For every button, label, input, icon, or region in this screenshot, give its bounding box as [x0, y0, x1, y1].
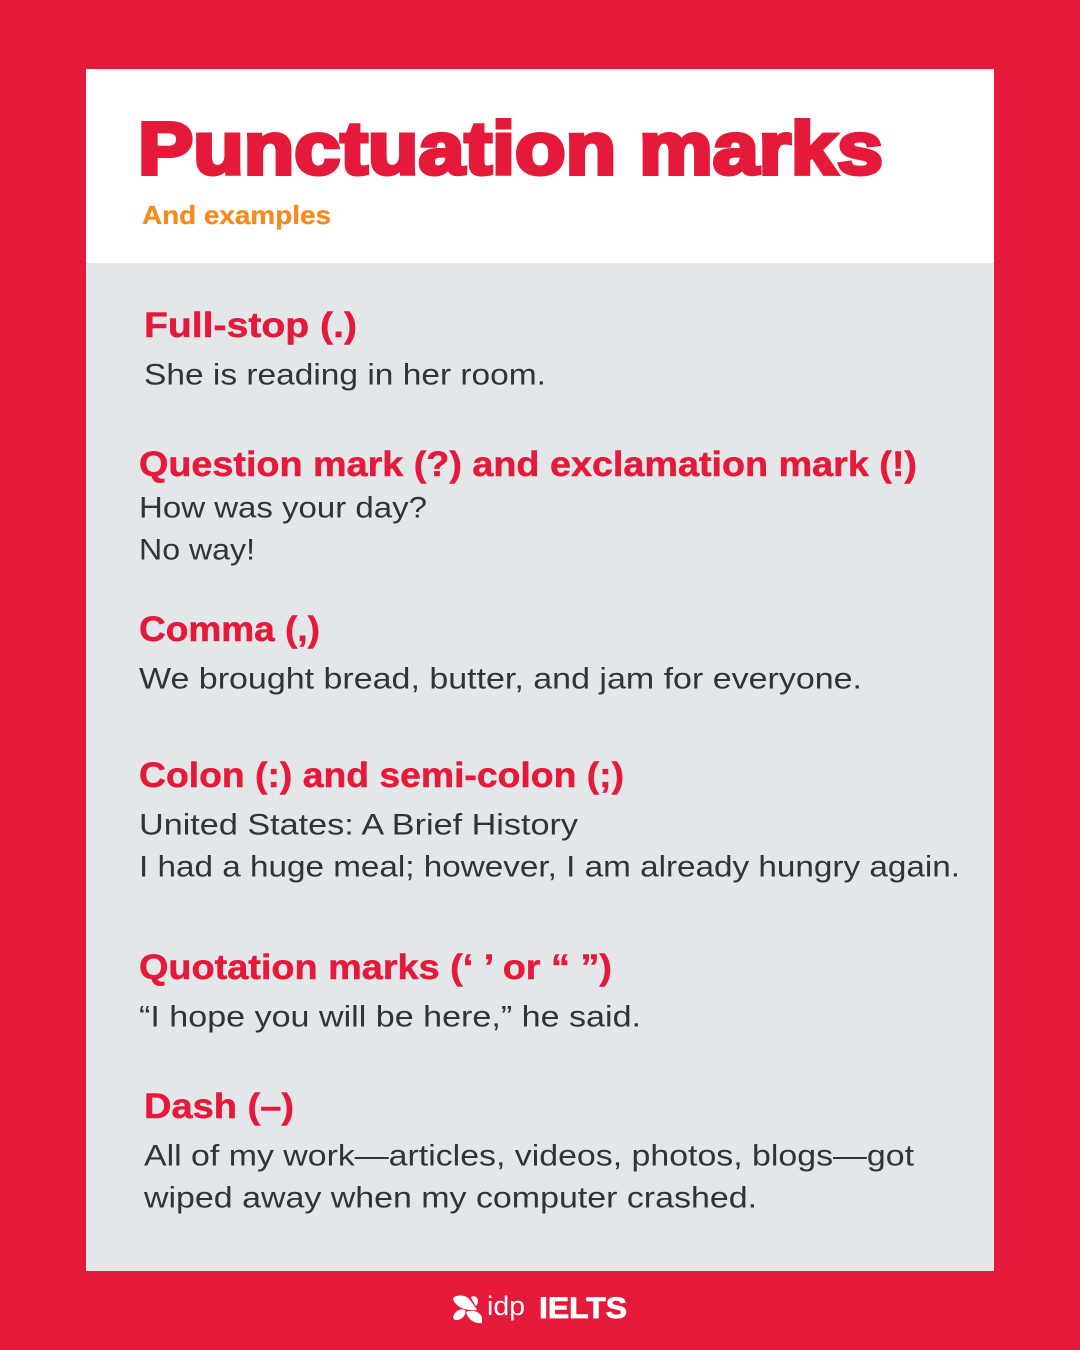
section: question and exclamation marks: How was your day?	[139, 492, 427, 524]
section: quotation marks	[139, 948, 641, 1034]
section: question and exclamation marks: Question mark (?) and exclamation mark (!)	[139, 445, 917, 484]
content panel	[86, 263, 994, 1271]
section: full-stop	[144, 306, 546, 392]
section: dash: Dash (–)	[144, 1087, 294, 1126]
section: dash: All of my work—articles, videos, photos, blogs—got	[144, 1140, 915, 1172]
section: quotation marks: “I hope you will be here,” he said.	[139, 1000, 641, 1034]
logo: idp IELTS	[453, 1291, 627, 1325]
subtitle: And examples	[142, 200, 331, 230]
title: Punctuation marks	[138, 107, 883, 190]
section: quotation marks: Quotation marks (‘ ’ or “ ”)	[139, 948, 612, 987]
section: colon and semi-colon: Colon (:) and semi-colon (;)	[139, 756, 624, 795]
section: comma: We brought bread, butter, and jam for everyone.	[139, 662, 862, 696]
section: dash: wiped away when my computer crashed.	[143, 1182, 757, 1214]
section: question and exclamation marks	[139, 445, 917, 566]
section: comma	[139, 610, 862, 696]
section: full-stop: Full-stop (.)	[144, 306, 357, 345]
section: colon and semi-colon: I had a huge meal; however, I am already hungry again.	[139, 850, 960, 884]
section: comma: Comma (,)	[139, 610, 320, 649]
logo wordmark idp: idp	[487, 1291, 525, 1321]
section: colon and semi-colon: United States: A Brief History	[139, 808, 578, 842]
section: dash	[143, 1087, 915, 1214]
section: full-stop: She is reading in her room.	[144, 358, 546, 392]
header panel	[86, 69, 994, 263]
icon: idp leaves	[453, 1296, 482, 1323]
logo wordmark IELTS: IELTS	[539, 1292, 627, 1325]
section: question and exclamation marks: No way!	[139, 534, 255, 566]
section: colon and semi-colon	[139, 756, 960, 884]
